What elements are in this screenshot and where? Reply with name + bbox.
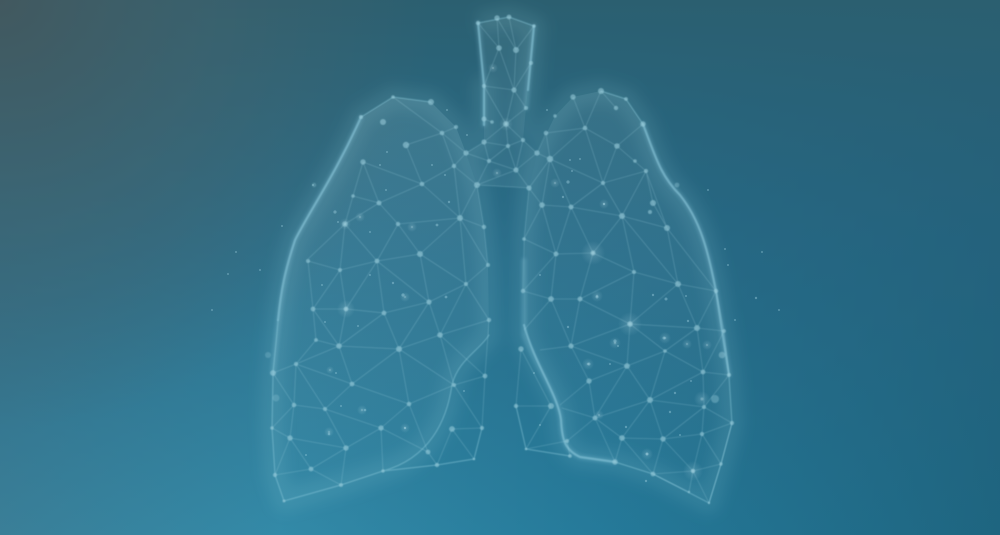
- network nodes: [265, 15, 734, 504]
- lung halo glow: [272, 17, 732, 503]
- small particles: [211, 109, 780, 482]
- glowing stars: [324, 63, 712, 481]
- lung outlines: [272, 17, 732, 503]
- left lung body: [272, 97, 489, 501]
- trachea body: [466, 17, 537, 188]
- network edges: [272, 17, 732, 503]
- right lung body: [524, 91, 732, 503]
